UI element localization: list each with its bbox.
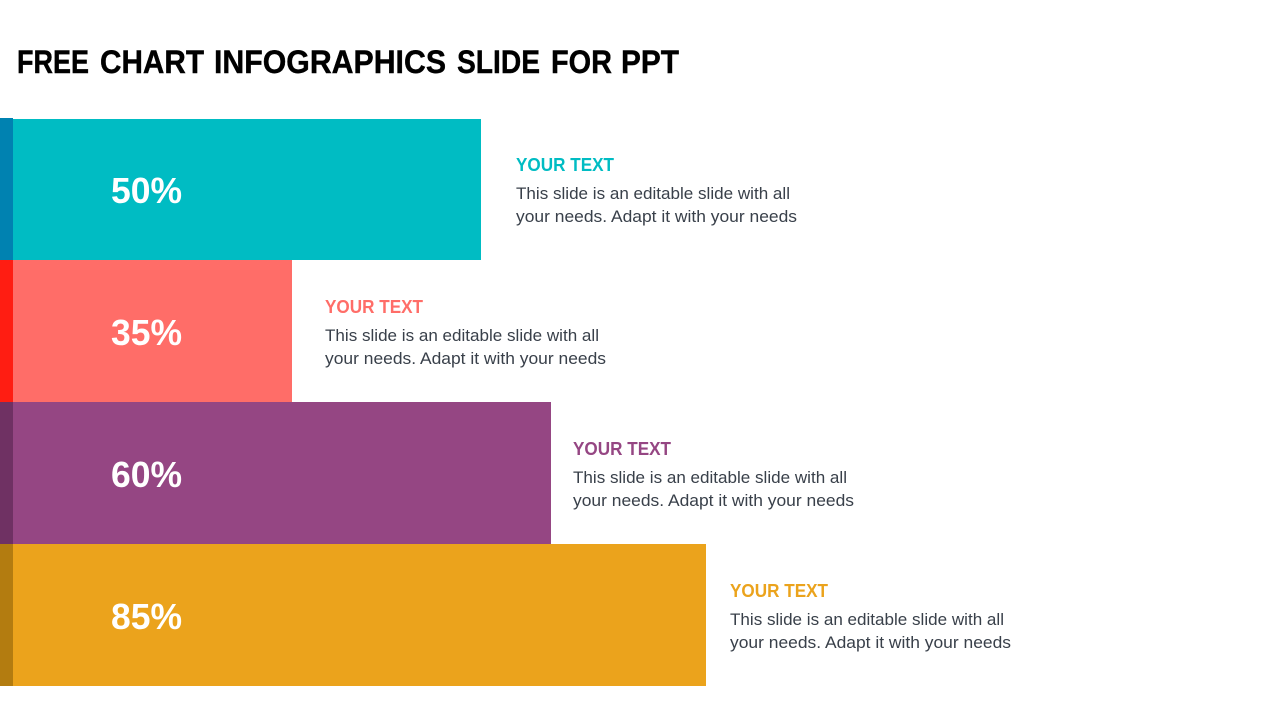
title: FREE (17, 44, 89, 80)
bar accent: dark purple strip (0, 402, 13, 544)
value: 60%: 60% (111, 454, 182, 495)
value: 50%: 50% (111, 170, 182, 211)
text block: purple (573, 439, 854, 510)
value: 85%: 85% (111, 596, 182, 637)
heading: purple: YOUR TEXT (573, 439, 671, 459)
bar: 60% purple (0, 402, 551, 544)
bar fill: amber (13, 544, 706, 686)
heading: coral: YOUR TEXT (325, 297, 423, 317)
title: SLIDE (457, 44, 540, 80)
description: coral: This slide is an editable slide with all (325, 326, 599, 345)
description: purple: This slide is an editable slide with all (573, 468, 847, 487)
text block: amber (730, 581, 1011, 652)
bar fill: coral (13, 260, 292, 402)
text block: coral (325, 297, 606, 368)
bar fill: teal (13, 119, 481, 260)
title: CHART (100, 44, 204, 80)
bar: 35% coral (0, 260, 292, 402)
description: coral: your needs. Adapt it with your needs (325, 349, 606, 368)
description: amber: your needs. Adapt it with your needs (730, 633, 1011, 652)
value: 35%: 35% (111, 312, 182, 353)
bar fill: purple (13, 402, 551, 544)
description: coral (325, 326, 606, 368)
description: teal: This slide is an editable slide with all (516, 184, 790, 203)
bar accent: dark amber strip (0, 544, 13, 686)
description: purple: your needs. Adapt it with your needs (573, 491, 854, 510)
description: amber (730, 610, 1011, 652)
bar accent: red strip (0, 260, 13, 402)
bar accent: dark blue strip (0, 118, 13, 260)
bar: 50% teal (0, 118, 481, 260)
title: INFOGRAPHICS (214, 44, 446, 80)
title: FOR (551, 44, 612, 80)
description: teal: your needs. Adapt it with your needs (516, 207, 797, 226)
bar: 85% amber (0, 544, 706, 686)
title: PPT (621, 44, 679, 80)
heading: teal: YOUR TEXT (516, 155, 614, 175)
title (17, 44, 679, 80)
heading: amber: YOUR TEXT (730, 581, 828, 601)
text block: teal (516, 155, 797, 226)
description: purple (573, 468, 854, 510)
description: amber: This slide is an editable slide with all (730, 610, 1004, 629)
description: teal (516, 184, 797, 226)
